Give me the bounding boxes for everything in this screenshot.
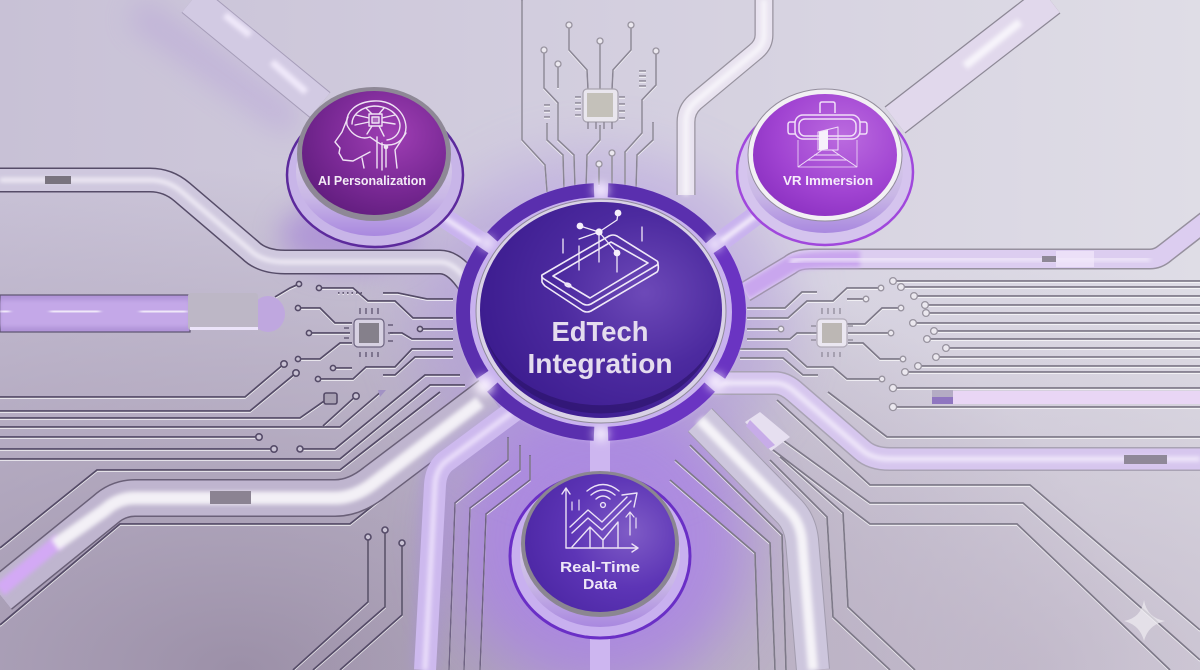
- glass body: VR: [747, 107, 903, 233]
- tube: left glowing capsule: [0, 293, 285, 332]
- node: VR Immersion button: [737, 89, 913, 245]
- label: VR Immersion: VR Immersion: [783, 173, 873, 188]
- icon: VR headset with door: [788, 102, 867, 167]
- tube: lower centre left: [425, 410, 515, 670]
- label: Real-Time Data: Real-Time: [560, 559, 640, 576]
- chip: left: [344, 308, 393, 357]
- circuit traces: left board: [0, 284, 480, 670]
- tube: upper right: [745, 218, 1200, 292]
- icon: sparkle watermark: [1124, 600, 1165, 641]
- heading: EdTech Integration: EdTech: [552, 316, 648, 347]
- cap: VR: [753, 94, 897, 216]
- tube: lower centre right: [700, 420, 813, 670]
- hub cap: [480, 202, 722, 418]
- rim: VR: [748, 89, 902, 221]
- hub inner rim: [476, 199, 726, 423]
- rim: AI: [297, 87, 451, 221]
- tube: top left diagonal: [192, 0, 320, 105]
- circuit nodes: left board: [256, 281, 423, 546]
- circuit traces: right board: [670, 281, 1200, 670]
- tube: lower left: [0, 395, 490, 595]
- cap: AI: [302, 91, 446, 215]
- glass body: AI: [296, 108, 452, 236]
- hub cap shadow: [482, 325, 720, 413]
- circuit traces: top board: [522, 0, 656, 192]
- tube: right short glow: [932, 390, 1200, 404]
- tube: upper left: [0, 176, 470, 285]
- connector: hub to data: [590, 430, 610, 670]
- node: Real-Time Data button: [510, 471, 690, 638]
- chip: top: [583, 89, 618, 129]
- tube: top right diagonal: [895, 0, 1050, 120]
- hub glass base: [457, 184, 745, 440]
- label: AI Personalization: AI Personalization: [318, 173, 426, 188]
- cap: Data: [525, 474, 675, 612]
- node: AI Personalization button: [287, 87, 463, 247]
- circuit nodes: right and top boards: [541, 22, 949, 411]
- circuit traces: bottom left of hub: [449, 437, 530, 670]
- base ring: AI: [287, 103, 463, 247]
- icon: brain with chip: [335, 101, 406, 170]
- connector: AI to hub: [425, 205, 490, 248]
- connector: VR to hub: [712, 205, 770, 248]
- node: central EdTech Integration hub: [457, 183, 745, 441]
- glass body: Data: [520, 483, 680, 627]
- icon: tablet with data nodes: [542, 210, 658, 312]
- node: central EdTech Integration hub: Integration: [528, 348, 672, 379]
- base ring: VR: [737, 99, 913, 245]
- tube: top centre: [686, 0, 764, 195]
- hub ring segments: [463, 190, 739, 434]
- tube: lower right: [680, 383, 1200, 464]
- hub glow points: [475, 183, 724, 441]
- node: Real-Time Data button: Data: [583, 576, 618, 593]
- rim: Data: [521, 471, 679, 617]
- icon: data chart with wifi: [562, 484, 638, 552]
- base ring: Data: [510, 474, 690, 638]
- chip: right: [811, 308, 853, 357]
- connector block: lower right: [745, 412, 790, 451]
